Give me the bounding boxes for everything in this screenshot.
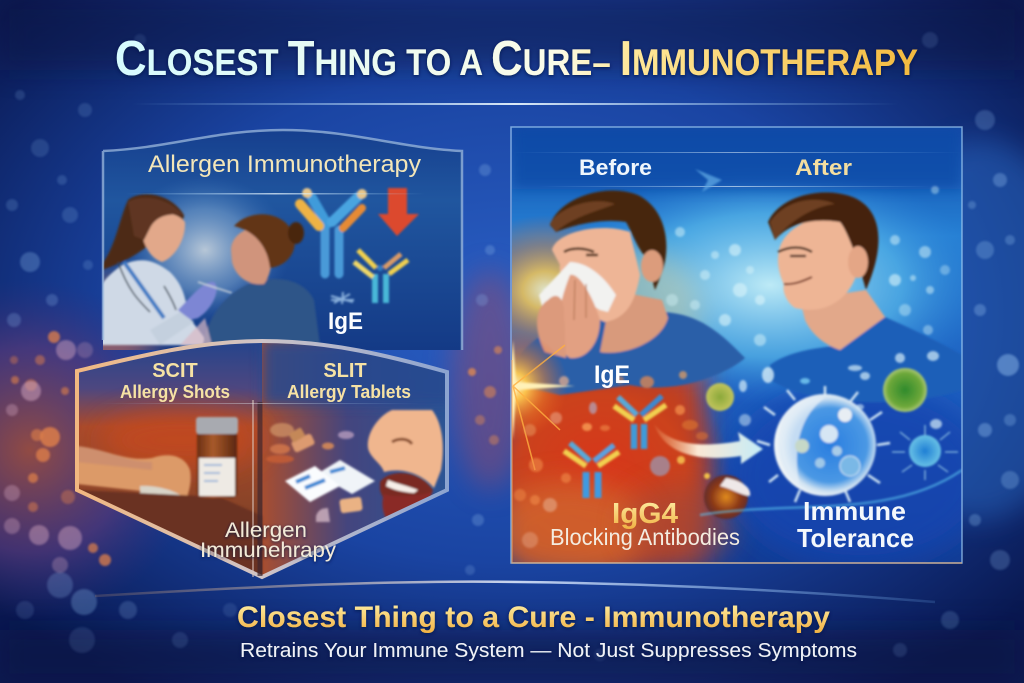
- icon: small blue cell: [892, 425, 958, 480]
- label: IgG4: IgG4: [612, 498, 678, 530]
- icon: red-brown cell: [650, 456, 670, 476]
- footer heading: Closest Thing to a Cure - Immunotherapy: [237, 601, 830, 634]
- icon: down arrow: [378, 188, 419, 236]
- icon: nose and mouth: [368, 410, 443, 525]
- label: before: Before: [579, 155, 652, 180]
- sunburst: [512, 334, 574, 470]
- label: SCIT: SCIT: [152, 360, 198, 382]
- icon: small antibody: [354, 250, 408, 303]
- panel: SCIT and SLIT shield: [77, 340, 452, 580]
- icon: arm: [77, 446, 262, 577]
- icon: man after smiling: [768, 192, 962, 402]
- panel: before and after: [510, 126, 963, 564]
- icon: tablets: [266, 423, 375, 522]
- icon: large immune cell: [757, 386, 890, 502]
- icon: doctor: [84, 194, 232, 345]
- icon: large antibody: [300, 189, 366, 274]
- label: allergy shots: Allergy Shots: [120, 382, 230, 402]
- label: after: After: [795, 155, 852, 180]
- caption: allergen immunehrapy: Allergen: [225, 519, 307, 542]
- label: IgE: IgE: [594, 361, 630, 389]
- footer arc line: [95, 582, 935, 602]
- panel: allergen immunotherapy procedure: [102, 128, 464, 350]
- icon: antibody IgE: [614, 396, 666, 449]
- icon: orange spiky cell: [704, 475, 750, 519]
- label: immune tolerance: Tolerance: [797, 523, 914, 553]
- icon: medicine bottle: [196, 417, 238, 498]
- icon: olive cell: [706, 383, 734, 411]
- icon: before to after arrow: [695, 169, 722, 192]
- caption: allergen immunehrapy: Immunehrapy: [200, 539, 337, 562]
- label: blocking antibodies: Blocking Antibodies: [550, 524, 740, 550]
- label: IgE: IgE: [328, 308, 363, 335]
- footer subheading: Retrains Your Immune System — Not Just Suppresses Symptoms: [240, 640, 857, 662]
- label: allergy tablets: Allergy Tablets: [287, 382, 411, 402]
- label: SLIT: SLIT: [323, 360, 367, 382]
- curved arrow: [654, 424, 763, 464]
- icon: green cell: [883, 368, 927, 412]
- icon: man before sneezing: [514, 191, 745, 395]
- icon: pollen: [331, 292, 354, 304]
- title: CLOSEST THING TO A CURE– IMMUNOTHERAPY: [115, 32, 918, 86]
- heading: allergen immunotherapy: Allergen Immunotherapy: [148, 151, 421, 178]
- label: immune tolerance: Immune: [803, 496, 906, 526]
- icon: antibody IgG4: [564, 443, 619, 498]
- icon: patient: [180, 214, 320, 345]
